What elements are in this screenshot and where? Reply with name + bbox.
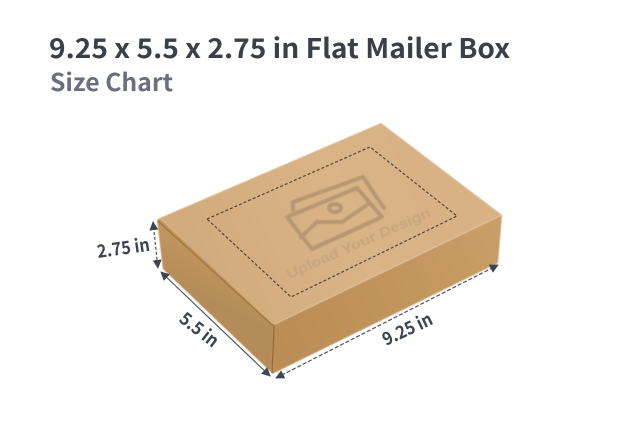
arrow: height (153, 222, 158, 268)
box top face (160, 123, 502, 325)
label: 5.5 in: 5.5 in (174, 305, 225, 353)
mailer box (157, 123, 502, 374)
label: 9.25 in: 9.25 in (378, 305, 437, 351)
box front side (272, 215, 502, 374)
title: 9.25 x 5.5 x 2.75 in Flat Mailer Box (49, 27, 510, 66)
corner seam (272, 326, 274, 373)
box left side (157, 218, 275, 373)
arrow: length (276, 265, 498, 378)
print area dashed outline (207, 147, 457, 297)
icon: upload image (287, 177, 384, 249)
flap edge (158, 221, 274, 326)
upload text: Upload Your Design (284, 204, 433, 282)
label: 2.75 in: 2.75 in (95, 231, 151, 264)
subtitle: Size Chart (50, 63, 173, 98)
arrow: width (161, 272, 270, 376)
